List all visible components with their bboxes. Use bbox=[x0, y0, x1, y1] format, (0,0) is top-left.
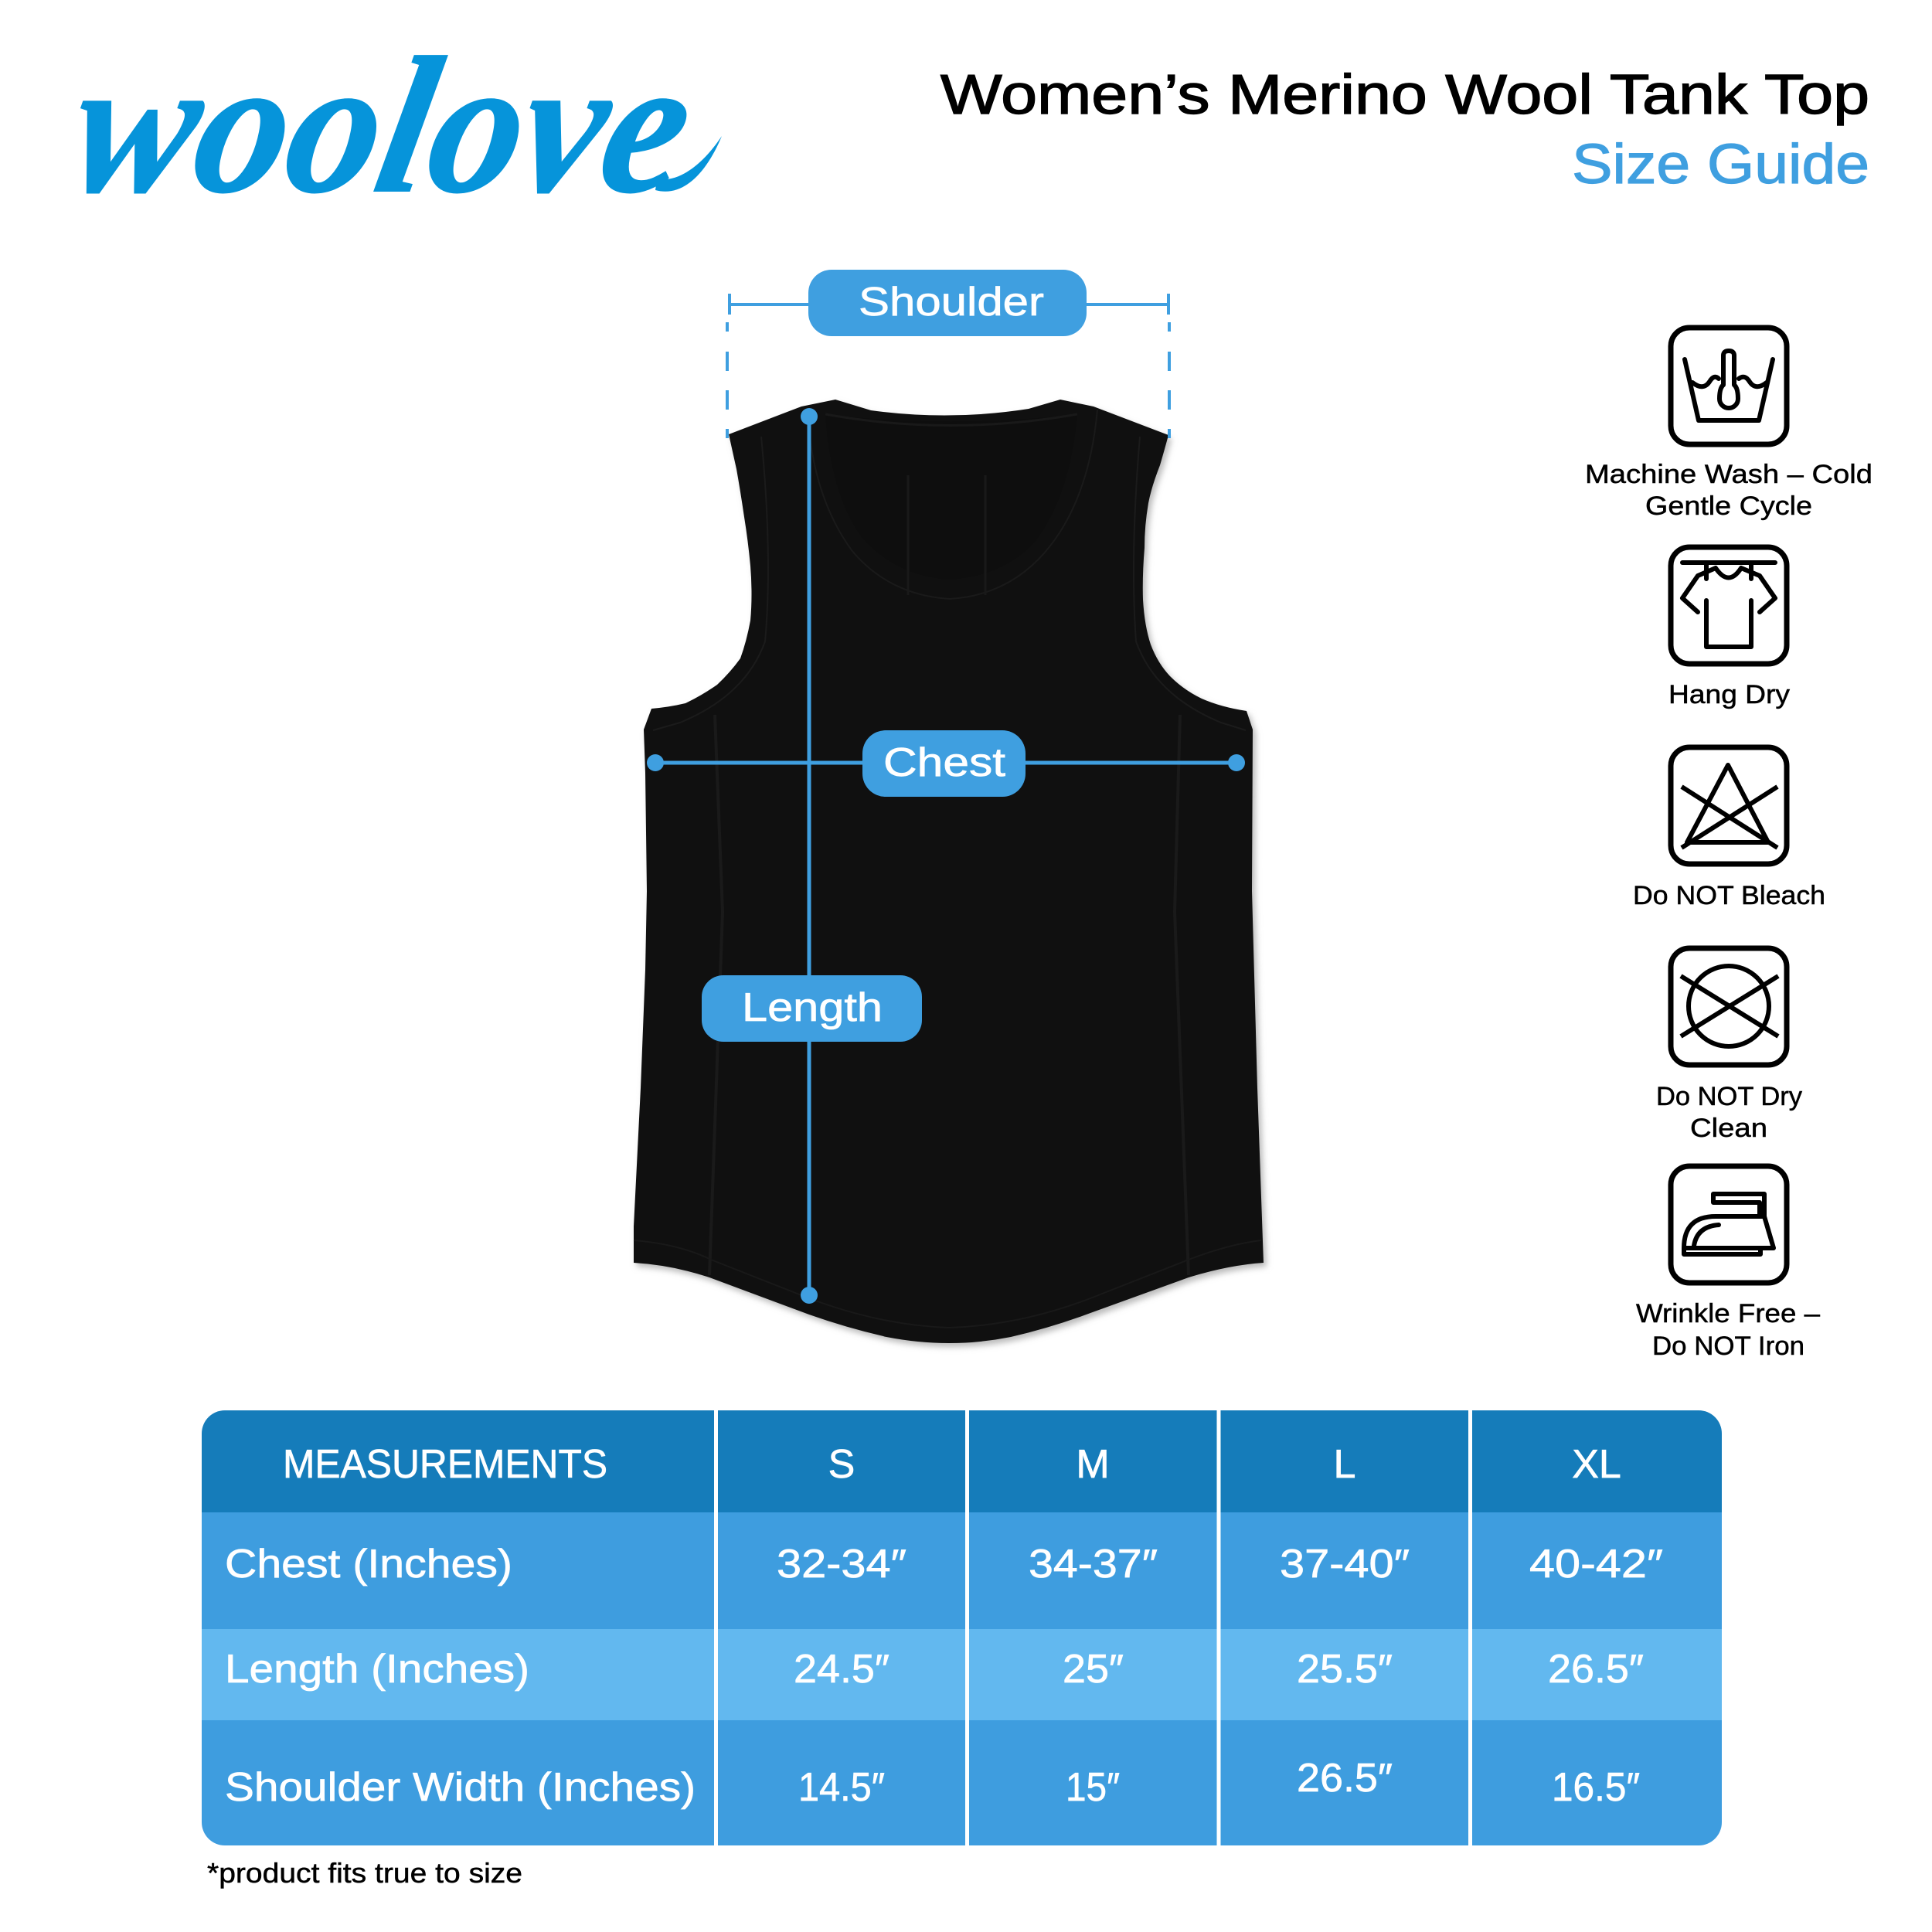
size table bbox=[202, 1410, 1722, 1845]
footnote: *product fits true to size bbox=[207, 1857, 522, 1889]
header row: M bbox=[1076, 1442, 1110, 1487]
shoulder measure line bbox=[727, 294, 1169, 438]
length measure line bbox=[801, 408, 818, 1304]
label: do not bleach: Do NOT Bleach bbox=[1633, 881, 1825, 910]
header row: MEASUREMENTS bbox=[283, 1442, 607, 1487]
tank top garment bbox=[634, 400, 1267, 1347]
row: shoulder width: Shoulder Width (Inches) bbox=[225, 1765, 696, 1810]
header row bbox=[283, 1442, 1621, 1487]
row: chest: 37-40″ bbox=[1280, 1542, 1410, 1587]
label: do not dry: Do NOT Dry bbox=[1656, 1082, 1802, 1111]
row: length: 24.5″ bbox=[794, 1647, 889, 1692]
title: Women’s Merino Wool Tank Top bbox=[940, 64, 1869, 126]
header row: S bbox=[828, 1442, 855, 1487]
header row: L bbox=[1334, 1442, 1355, 1487]
row: chest: 40-42″ bbox=[1529, 1542, 1663, 1587]
care: do not dry clean bbox=[1656, 948, 1802, 1143]
care: do not bleach bbox=[1633, 747, 1825, 910]
label: gentle cycle: Gentle Cycle bbox=[1645, 492, 1812, 521]
table rows background bbox=[202, 1410, 1722, 1845]
row: length: 26.5″ bbox=[1548, 1647, 1644, 1692]
logo: woolove: woolove bbox=[56, 18, 709, 233]
icon: wash basin bbox=[1671, 328, 1787, 444]
length label: Length bbox=[742, 985, 883, 1030]
chest label: Chest bbox=[883, 740, 1006, 785]
label: wrinkle free: Wrinkle Free – bbox=[1636, 1299, 1820, 1328]
label: clean: Clean bbox=[1690, 1114, 1767, 1143]
row: length bbox=[225, 1647, 1644, 1692]
icon: iron bbox=[1671, 1166, 1787, 1283]
row: shoulder width: 14.5″ bbox=[798, 1765, 885, 1810]
row: length: 25.5″ bbox=[1297, 1647, 1393, 1692]
label: machine wash: Machine Wash – Cold bbox=[1585, 460, 1872, 489]
row: chest: Chest (Inches) bbox=[225, 1542, 512, 1587]
care: hang dry bbox=[1668, 547, 1790, 709]
header row: XL bbox=[1572, 1442, 1621, 1487]
icon: hanging shirt bbox=[1671, 547, 1787, 664]
row: chest: 32-34″ bbox=[777, 1542, 906, 1587]
shoulder label: Shoulder bbox=[859, 280, 1044, 325]
row: shoulder width bbox=[225, 1756, 1640, 1810]
label: hang dry: Hang Dry bbox=[1668, 680, 1790, 709]
row: chest: 34-37″ bbox=[1029, 1542, 1158, 1587]
icon: crossed circle bbox=[1671, 948, 1787, 1065]
subtitle: size guide: Size Guide bbox=[1572, 134, 1869, 196]
care: wrinkle free bbox=[1636, 1166, 1820, 1361]
label: do not iron: Do NOT Iron bbox=[1652, 1332, 1804, 1361]
row: length: Length (Inches) bbox=[225, 1647, 529, 1692]
row: shoulder width: 15″ bbox=[1066, 1765, 1120, 1810]
shoulder label bbox=[808, 270, 1087, 336]
chest label bbox=[862, 730, 1026, 797]
row: shoulder width: 26.5″ bbox=[1297, 1756, 1393, 1801]
row: length: 25″ bbox=[1063, 1647, 1124, 1692]
icon: crossed triangle bbox=[1671, 747, 1787, 864]
length label bbox=[702, 975, 922, 1042]
row: shoulder width: 16.5″ bbox=[1552, 1765, 1640, 1810]
care: machine wash bbox=[1585, 328, 1872, 521]
chest measure line bbox=[647, 754, 1245, 771]
row: chest bbox=[225, 1542, 1663, 1587]
